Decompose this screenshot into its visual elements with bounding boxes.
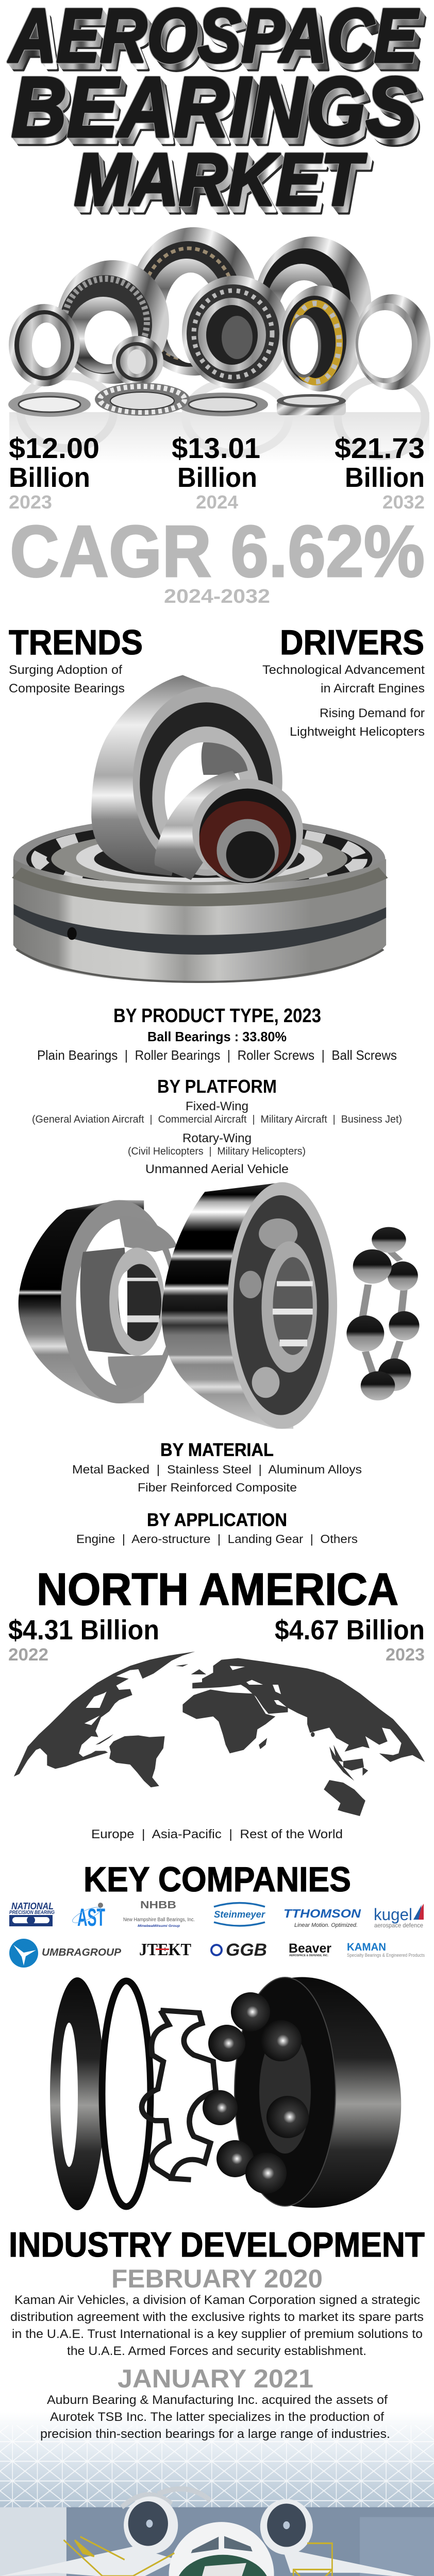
logo: umbra group <box>9 1939 122 1968</box>
logo: kugel <box>374 1904 424 1929</box>
segment: by application: BY APPLICATION <box>147 1510 287 1530</box>
bearing: roller with brass cage <box>279 285 363 392</box>
logo: steinmeyer: Steinmeyer <box>214 1909 265 1920</box>
logo: kaman: Specialty Bearings & Engineered Products <box>347 1953 425 1958</box>
bearing: small front <box>112 336 163 386</box>
regions list: Europe | Asia-Pacific | Rest of the World <box>91 1827 343 1841</box>
ceiling <box>0 2412 434 2517</box>
segment: by application: Engine | Aero-structure | Landing Gear | Others <box>76 1532 358 1546</box>
stat: north america 2022 <box>8 1615 159 1665</box>
region heading: north america: NORTH AMERICA <box>37 1564 398 1615</box>
bearing: tapered roller left <box>57 260 169 384</box>
segment: by platform: (General Aviation Aircraft | Commercial Aircraft | Military Aircraft | Business Jet) <box>32 1114 402 1125</box>
image: group of steel bearings <box>8 227 430 464</box>
segment: by product type: Plain Bearings | Roller Bearings | Roller Screws | Ball Screws <box>37 1047 397 1063</box>
base bearing top face <box>13 816 386 902</box>
logo: NHBB <box>123 1900 195 1928</box>
stat: 2023 market size: 2023 <box>9 492 52 513</box>
logo: beaver: Beaver <box>289 1941 331 1956</box>
bearing outer race <box>235 1977 401 2208</box>
thrust discs <box>8 383 346 417</box>
eurasia <box>192 1658 425 1762</box>
text block: kaman development: in the U.A.E. Trust International is a key supplier of premium solutions to <box>12 2327 423 2341</box>
logo: beaver: AEROSPACE & DEFENSE, INC. <box>289 1954 328 1957</box>
stat: 2032 market size: Billion <box>345 462 425 493</box>
logo: national precision bearing <box>9 1901 55 1926</box>
image: stacked bearings with red seal <box>13 675 386 983</box>
north america and greenland <box>9 1652 195 1802</box>
iceland and britain <box>176 1664 206 1674</box>
aircraft fuselage <box>169 2522 274 2576</box>
title line: market: MARKET <box>74 138 367 221</box>
segment: by product type: BY PRODUCT TYPE, 2023 <box>113 1005 321 1027</box>
wings <box>0 2547 434 2576</box>
logo: kaman <box>347 1941 425 1958</box>
panel: trends <box>9 623 143 696</box>
logo: NHBB: MinebeaMitsumi Group <box>138 1924 180 1928</box>
panel: drivers <box>262 623 425 739</box>
panel: drivers: Technological Advancement <box>262 663 425 677</box>
segment: by application <box>76 1510 358 1546</box>
segment: by platform: Rotary-Wing <box>182 1131 252 1145</box>
sri lanka <box>311 1732 315 1737</box>
segment: by material: Fiber Reinforced Composite <box>138 1481 297 1494</box>
walls <box>0 2507 434 2576</box>
yellow scaffolds <box>42 2537 332 2576</box>
stat: CAGR: 2024-2032 <box>164 586 270 607</box>
image: chrome bearings <box>19 1182 420 1429</box>
shield ring <box>50 1977 105 2210</box>
text block: auburn development: Aurotek TSB Inc. The latter specializes in the production of <box>50 2410 384 2424</box>
logo: AST: AST <box>77 1904 105 1931</box>
seal ring <box>102 1981 151 2207</box>
stat: 2024 market size: 2024 <box>196 492 238 513</box>
logo: national precision bearing: NATIONAL <box>11 1901 54 1911</box>
logo: AST <box>71 1903 105 1931</box>
africa <box>182 1689 275 1753</box>
base bearing side wall <box>13 859 386 983</box>
stat: 2032 market size <box>335 432 425 513</box>
bearing: large centre <box>182 276 289 389</box>
madagascar <box>259 1738 267 1749</box>
bearing: chrome left <box>19 1200 177 1403</box>
ball cage <box>142 2010 216 2180</box>
segment: by platform: Unmanned Aerial Vehicle <box>145 1162 289 1176</box>
stat: 2024 market size: $13.01 <box>172 432 260 464</box>
logo: kugel: aerospace defence <box>374 1922 423 1929</box>
reflection below bearings <box>9 376 429 464</box>
bearing: small with red seal <box>155 771 303 884</box>
stat: 2023 market size: Billion <box>9 462 90 493</box>
stat: 2023 market size: $12.00 <box>9 432 99 464</box>
text block: kaman development: the U.A.E. Armed Forces and security establishment. <box>67 2344 366 2358</box>
stat: north america 2022: 2022 <box>8 1645 48 1665</box>
bearing: large back centre <box>130 227 258 376</box>
text block: kaman development <box>10 2293 424 2358</box>
panel: drivers: in Aircraft Engines <box>321 682 425 696</box>
bearing: chrome right <box>162 1182 337 1429</box>
date: january 2021: JANUARY 2021 <box>118 2364 313 2393</box>
image: aircraft in hangar <box>0 2412 434 2576</box>
image: exploded black bearing <box>50 1977 401 2210</box>
inland seas <box>230 1666 287 1707</box>
stat: 2023 market size <box>9 432 99 513</box>
segment: by platform: BY PLATFORM <box>157 1076 277 1097</box>
logo: thomson: Linear Motion. Optimized. <box>294 1922 358 1928</box>
southeast asia and islands <box>329 1745 368 1781</box>
bearing: standing large <box>91 675 282 876</box>
panel: trends: Surging Adoption of <box>9 663 122 677</box>
caribbean <box>95 1734 113 1745</box>
logo: NHBB: New Hampshire Ball Bearings, Inc. <box>123 1917 195 1923</box>
title <box>8 0 420 221</box>
text block: kaman development: Kaman Air Vehicles, a division of Kaman Corporation signed a strategic <box>14 2293 420 2307</box>
segment: by material: BY MATERIAL <box>160 1440 274 1460</box>
world map <box>9 1652 425 1816</box>
date: february 2020: FEBRUARY 2020 <box>111 2264 323 2293</box>
panel: drivers: DRIVERS <box>280 623 424 662</box>
panel: trends: TRENDS <box>9 623 143 662</box>
text block: auburn development: precision thin-section bearings for a large range of industries. <box>40 2427 390 2441</box>
segment: by platform: (Civil Helicopters | Military Helicopters) <box>128 1146 306 1157</box>
logo: ggb: GGB <box>226 1940 267 1960</box>
hudson bay <box>85 1691 107 1725</box>
text block: kaman development: distribution agreement with the exclusive rights to market its spare parts <box>10 2310 424 2324</box>
segment: by platform <box>32 1076 402 1176</box>
panel: drivers: Lightweight Helicopters <box>290 725 425 739</box>
segment: by product type: Ball Bearings : 33.80% <box>147 1029 287 1044</box>
bearing: back right <box>255 236 371 368</box>
segment: by product type <box>37 1005 397 1063</box>
logo: steinmeyer <box>214 1903 265 1926</box>
logo: national precision bearing: PRECISION BEARING <box>9 1910 55 1916</box>
panel: drivers: Rising Demand for <box>320 706 425 720</box>
stat: 2024 market size <box>172 432 260 513</box>
segment: by platform: Fixed-Wing <box>186 1099 248 1113</box>
stat: 2024 market size: Billion <box>177 462 257 493</box>
chrome ball cage <box>346 1227 420 1400</box>
steel balls <box>203 1992 309 2194</box>
logo: jtekt: JTEKT <box>139 1940 191 1959</box>
text block: auburn development <box>40 2393 390 2441</box>
stat: north america 2022: $4.31 Billion <box>8 1615 159 1646</box>
australia <box>324 1780 365 1816</box>
south america <box>109 1735 165 1787</box>
bearing: thin right <box>354 294 430 390</box>
logo: thomson <box>283 1907 361 1928</box>
bearing: small left <box>9 304 80 386</box>
logo: umbra group: UMBRAGROUP <box>42 1947 122 1958</box>
segment: by material <box>72 1440 362 1494</box>
logo: thomson: TTHOMSON <box>283 1907 361 1920</box>
stat: north america 2023: 2023 <box>386 1645 425 1665</box>
stat: north america 2023 <box>275 1615 425 1665</box>
text block: auburn development: Auburn Bearing & Manufacturing Inc. acquired the assets of <box>47 2393 388 2407</box>
engines <box>122 2489 313 2555</box>
logo: kaman: KAMAN <box>347 1941 386 1953</box>
stat: 2032 market size: 2032 <box>382 492 425 513</box>
stat: north america 2023: $4.67 Billion <box>275 1615 425 1646</box>
heading: key companies: KEY COMPANIES <box>84 1860 351 1899</box>
segment: by material: Metal Backed | Stainless Steel | Aluminum Alloys <box>72 1463 362 1476</box>
logo: NHBB: NHBB <box>140 1900 176 1911</box>
logo: kugel: kugel <box>374 1905 412 1924</box>
panel: trends: Composite Bearings <box>9 682 125 696</box>
stat: 2032 market size: $21.73 <box>335 432 425 464</box>
